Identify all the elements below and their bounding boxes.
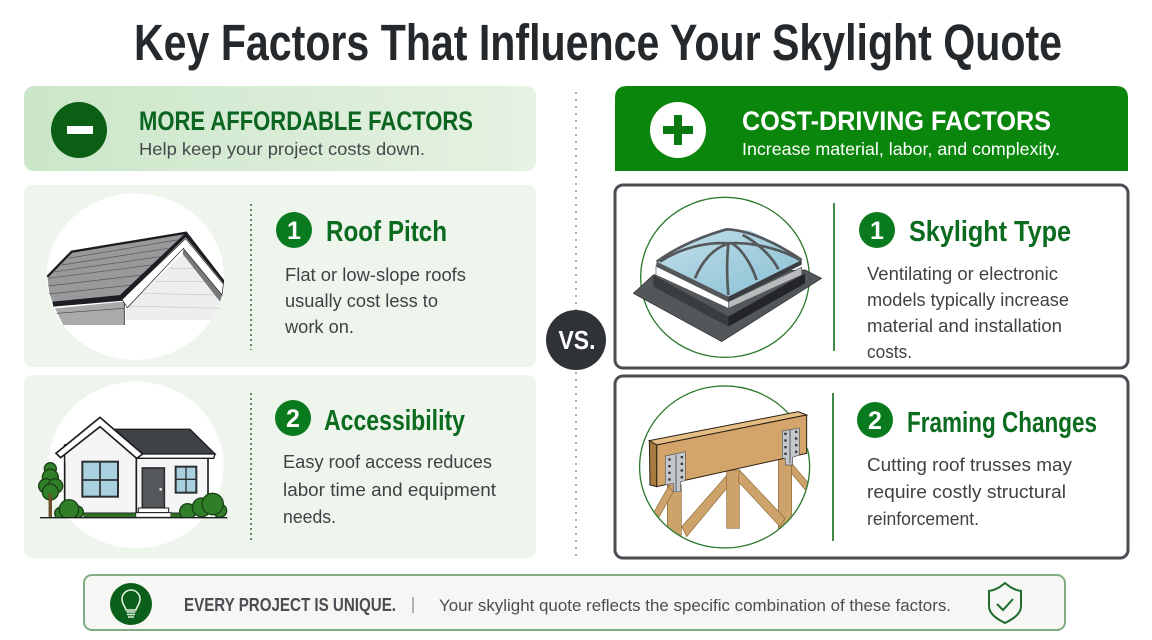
text: roof pitch description: Flat or low-slope roofs — [285, 264, 466, 285]
subheading: Help keep your project costs down. — [139, 139, 425, 159]
text: accessibility description: Easy roof access reduces — [283, 451, 492, 472]
icon: plus — [650, 102, 706, 158]
icon: roof illustration — [47, 193, 224, 360]
text: accessibility description — [283, 451, 496, 527]
heading: more affordable factors: MORE AFFORDABLE FACTORS — [139, 106, 473, 136]
footer callout — [84, 575, 1065, 630]
badge 1: 1 — [870, 217, 884, 245]
icon: light bulb — [110, 583, 152, 625]
window left — [82, 462, 118, 497]
panel: roof pitch — [24, 185, 536, 367]
tree — [39, 463, 63, 517]
badge 2 — [857, 402, 893, 438]
text: roof pitch description: usually cost less to — [285, 290, 438, 311]
heading: roof pitch: Roof Pitch — [326, 216, 447, 248]
text: roof pitch description: work on. — [284, 316, 354, 337]
icon: framing illustration — [639, 386, 810, 548]
text: skylight type description: material and installation — [867, 315, 1062, 336]
icon: shield check — [989, 583, 1021, 623]
window right — [176, 467, 196, 493]
door — [142, 468, 164, 508]
heading: framing changes: Framing Changes — [907, 407, 1097, 439]
divider — [832, 393, 834, 541]
icon: minus — [51, 102, 107, 158]
text: framing changes description: reinforcement. — [867, 508, 979, 529]
text: skylight type description — [867, 263, 1069, 362]
text: skylight type description: Ventilating or electronic — [867, 263, 1058, 284]
text: framing changes description: Cutting roof trusses may — [867, 454, 1073, 475]
bushes — [55, 493, 227, 520]
callout heading: EVERY PROJECT IS UNIQUE. — [184, 595, 396, 615]
badge 2: 2 — [286, 405, 300, 433]
divider — [833, 203, 835, 351]
text: framing changes description: require costly structural — [867, 481, 1066, 502]
badge 2: 2 — [868, 407, 882, 435]
icon: house illustration — [39, 382, 227, 548]
divider — [250, 393, 252, 540]
panel: framing changes — [615, 376, 1128, 558]
callout text: Your skylight quote reflects the specific combination of these factors. — [439, 597, 951, 615]
panel: accessibility — [24, 375, 536, 558]
heading: cost-driving factors: COST-DRIVING FACTORS — [742, 106, 1051, 136]
panel: cost-driving header — [615, 86, 1128, 171]
divider — [250, 204, 252, 350]
center dotted divider — [575, 92, 577, 556]
text: framing changes description — [867, 454, 1073, 529]
subheading: Increase material, labor, and complexity. — [742, 139, 1060, 159]
text: accessibility description: labor time and equipment — [283, 479, 496, 500]
icon: skylight illustration — [633, 197, 822, 357]
text: skylight type description: costs. — [867, 341, 912, 362]
badge 1 — [859, 212, 895, 248]
text: accessibility description: needs. — [283, 506, 336, 527]
text: roof pitch description — [284, 264, 466, 337]
badge 1 — [276, 212, 312, 248]
badge 1: 1 — [287, 217, 301, 245]
bracket left — [665, 452, 685, 492]
heading: skylight type: Skylight Type — [909, 216, 1071, 248]
panel: more affordable header — [24, 86, 536, 171]
badge 2 — [275, 400, 311, 436]
bracket right — [782, 428, 799, 465]
heading: accessibility: Accessibility — [324, 405, 465, 437]
vs badge — [546, 310, 606, 370]
vs badge: VS. — [558, 325, 596, 355]
text: skylight type description: models typically increase — [867, 289, 1069, 310]
panel: skylight type — [615, 185, 1128, 368]
